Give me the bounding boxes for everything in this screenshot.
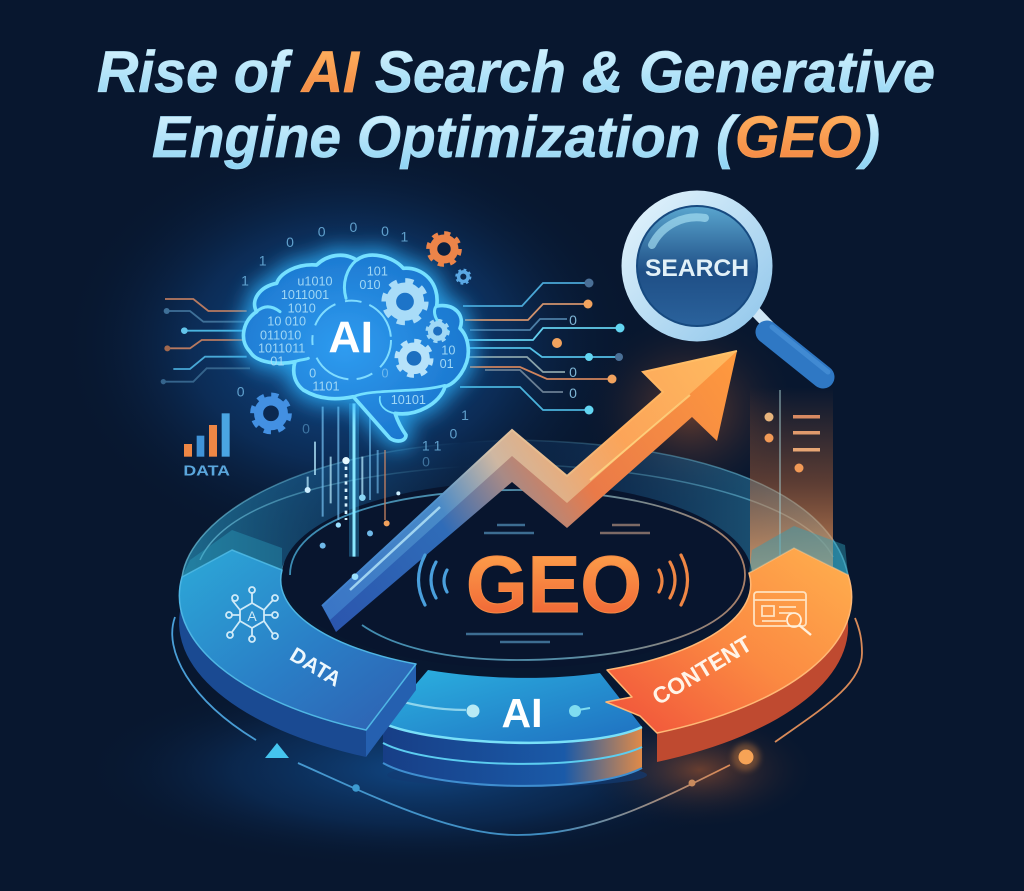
gear: lower — [397, 342, 431, 375]
binary text in brain: 011010 — [260, 328, 301, 342]
binary text in brain — [258, 265, 455, 407]
floating binary digits: 1 — [259, 252, 267, 268]
geo label: GEO — [466, 540, 642, 630]
signal waves left — [418, 555, 447, 605]
signal waves right — [659, 555, 688, 605]
binary text in brain: 1011011 — [258, 342, 305, 356]
binary text in brain: 1011001 — [281, 288, 329, 302]
brain folds — [257, 260, 448, 413]
data network icon — [226, 587, 278, 642]
ai label: AI — [328, 314, 373, 363]
ring segment: data — [179, 530, 416, 757]
gear: large top — [385, 282, 425, 322]
gear: left blue — [253, 396, 289, 431]
ring segment: ai — [362, 670, 647, 787]
title — [97, 40, 935, 170]
gear: small blue — [456, 270, 470, 284]
floating binary digits: 0 — [381, 223, 389, 239]
binary text in brain: 1010 — [288, 301, 316, 315]
brain group — [161, 219, 470, 580]
search label: SEARCH — [645, 255, 749, 282]
floating binary digits: 0 — [449, 425, 457, 441]
binary text in brain: 010 — [359, 278, 381, 292]
gear: orange — [429, 234, 459, 264]
ring back band — [182, 440, 848, 577]
floating binary digits: 0 — [318, 224, 326, 240]
floating binary digits: 0 — [286, 234, 294, 250]
growth arrow — [322, 351, 737, 632]
inner dark well — [282, 482, 752, 668]
left circuit lines — [161, 299, 250, 384]
binary text in brain: 101 — [367, 265, 388, 279]
floating binary digits: 1 1 — [422, 438, 442, 454]
data bar chart — [183, 413, 231, 480]
title: Engine Optimization (GEO) — [152, 105, 880, 170]
content webpage icon — [754, 592, 811, 635]
ring segment: content — [606, 526, 852, 762]
ai dashed ring — [312, 301, 391, 379]
floating binary digits: 1 — [241, 273, 249, 289]
right circuit lines: 0 — [569, 385, 577, 401]
floating binary digits: 0 — [237, 384, 245, 400]
floating binary digits — [237, 219, 469, 470]
binary text in brain: 01 — [440, 357, 454, 371]
gear: small — [427, 321, 448, 341]
data network icon: A — [247, 608, 257, 624]
title: Rise of AI Search & Generative — [97, 40, 935, 105]
ai segment label: AI — [502, 690, 542, 736]
binary text in brain: 0 — [309, 367, 316, 381]
binary text in brain: 1101 — [312, 380, 340, 394]
right circuit lines — [460, 278, 624, 414]
binary text in brain: 0 — [381, 366, 389, 380]
binary text in brain: u1010 — [297, 275, 333, 289]
data label: DATA — [286, 643, 345, 692]
binary text in brain: 01 — [270, 355, 284, 369]
brain outline — [243, 255, 468, 441]
right circuit lines: 0 — [569, 364, 577, 380]
binary text in brain: 10101 — [391, 393, 426, 407]
floating binary digits: 0 — [422, 454, 430, 470]
floating binary digits: 1 — [461, 407, 469, 423]
right circuit lines: 0 — [569, 312, 577, 328]
content label: CONTENT — [648, 630, 756, 710]
outer orbit line — [172, 617, 862, 835]
floating binary digits: 0 — [349, 219, 357, 235]
floating binary digits: 1 — [400, 228, 408, 244]
floating binary digits: 0 — [302, 420, 310, 436]
data bar chart: DATA — [183, 464, 231, 480]
right side orange panel — [750, 387, 833, 577]
orbit markers — [265, 743, 760, 792]
binary text in brain: 10 010 — [267, 315, 306, 329]
magnifying glass — [622, 190, 828, 377]
binary text in brain: 10 — [441, 344, 455, 358]
vertical data streams — [305, 403, 400, 580]
brain glow — [243, 255, 468, 441]
